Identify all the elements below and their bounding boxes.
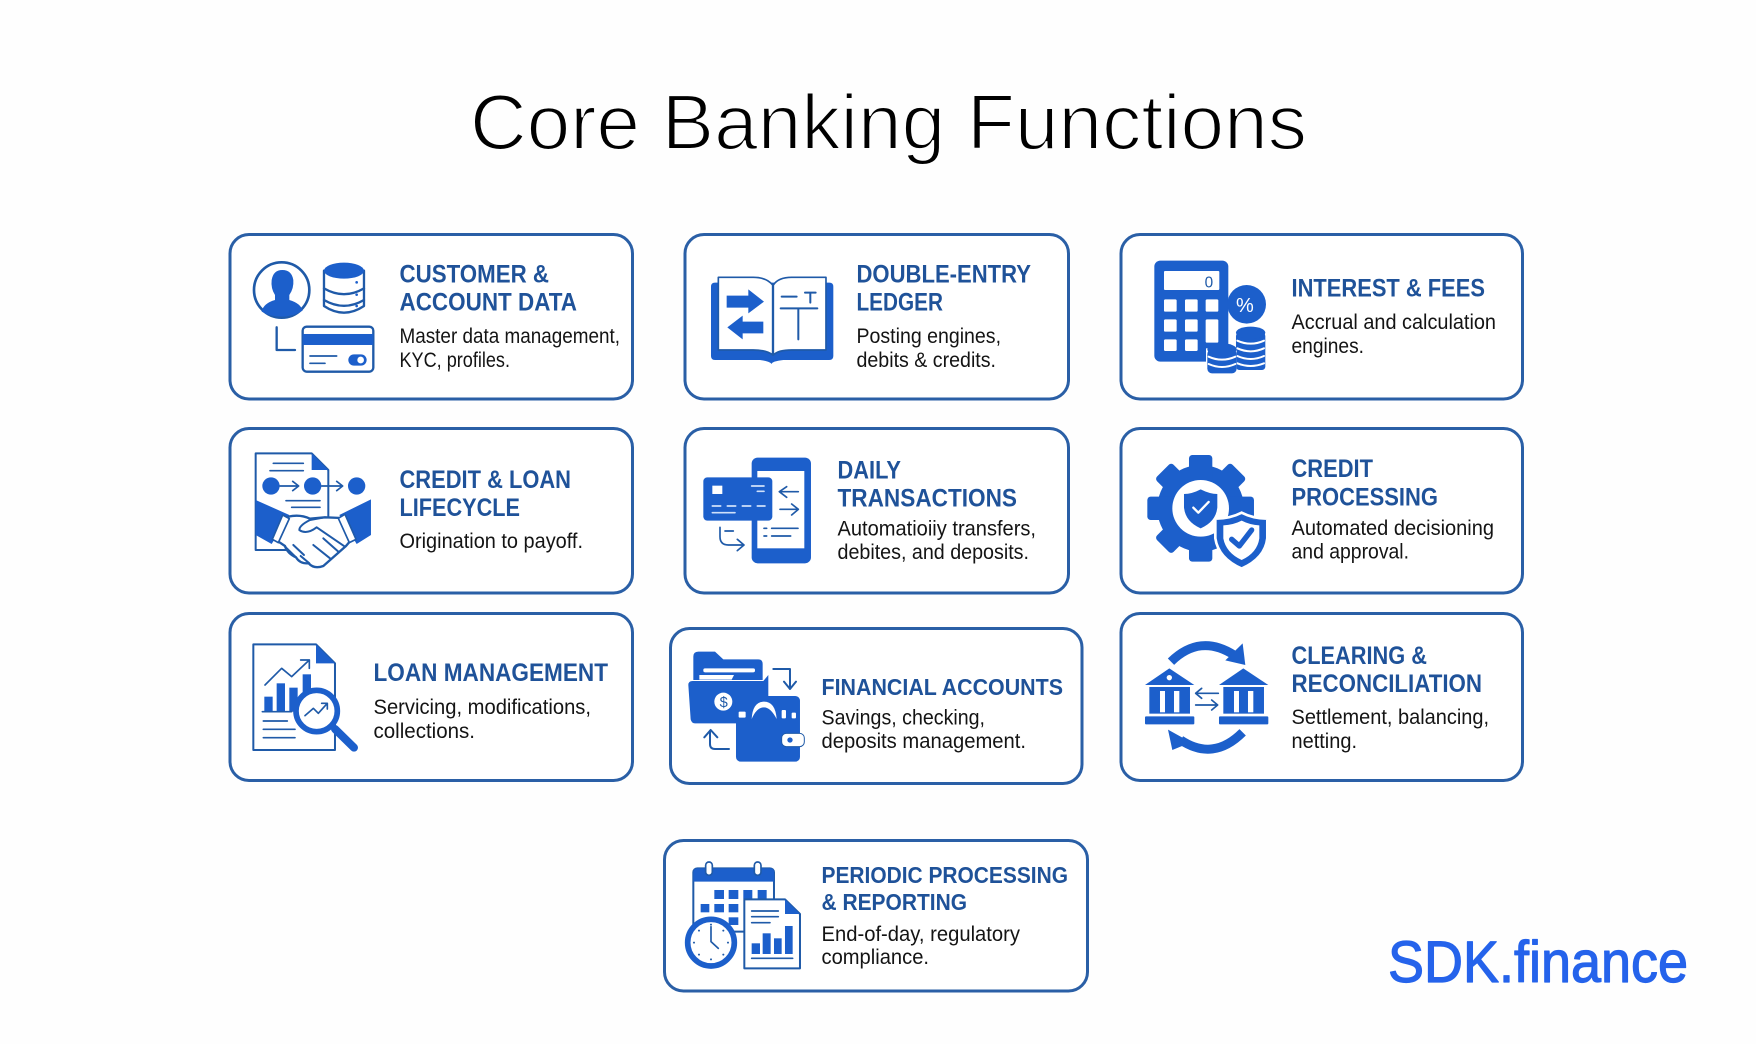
heading: LOAN MANAGEMENT [374,659,608,687]
icon: folder and wallet [688,652,804,762]
panel: loan management [230,614,632,780]
icon: customer, database and card [254,262,373,372]
heading: CREDIT [1292,455,1373,483]
heading [1292,455,1438,512]
description: Master data management, [400,325,620,348]
description: Automatioiiy transfers, [838,518,1036,540]
icon: banks with circular arrows [1145,643,1268,750]
icon: card and phone [703,458,811,563]
description [1292,517,1494,564]
panel: interest and fees [1121,234,1522,399]
description [822,706,1026,753]
heading [400,466,571,522]
heading: CLEARING & [1292,642,1427,670]
icon: report with magnifier [253,644,354,750]
description: Savings, checking, [822,706,985,730]
heading: PROCESSING [1292,484,1438,512]
heading: FINANCIAL ACCOUNTS [822,674,1063,700]
heading [400,260,577,316]
heading: CREDIT & LOAN [400,466,571,494]
icon: folder and wallet: $ [720,695,728,711]
description [1292,706,1489,753]
heading: INTEREST & FEES [1292,274,1485,302]
description [856,325,1001,372]
heading: & REPORTING [822,889,967,915]
panel: periodic processing and reporting [664,840,1088,991]
description: KYC, profiles. [400,349,510,372]
heading [856,260,1031,316]
description: Automated decisioning [1292,517,1494,540]
heading [838,456,1017,512]
logo: SDK.finance: SDK.finance [1388,930,1688,995]
description: debites, and deposits. [838,541,1029,564]
icon: calculator with coins: % [1236,295,1254,317]
icon: open ledger book [711,277,833,364]
icon: calculator with coins: 0 [1205,274,1213,291]
panel: customer and account data [230,234,632,399]
heading: LIFECYCLE [400,494,520,522]
description [400,325,620,372]
description: Settlement, balancing, [1292,706,1489,729]
heading: ACCOUNT DATA [400,288,577,316]
description [374,696,591,743]
description [822,923,1020,969]
description: and approval. [1292,540,1409,564]
heading: PERIODIC PROCESSING [822,862,1068,888]
description: Accrual and calculation [1292,311,1496,334]
panel: credit and loan lifecycle [230,428,632,593]
description [838,518,1036,564]
heading: DOUBLE-ENTRY [856,260,1031,288]
icon: gear with shields [1147,455,1267,569]
heading: DAILY [838,456,901,484]
description: engines. [1292,335,1364,358]
description: deposits management. [822,730,1026,753]
description [1292,311,1496,358]
icon: document flow and handshake [256,453,371,567]
description: End-of-day, regulatory [822,923,1020,946]
description: Origination to payoff. [400,530,583,553]
heading: LEDGER [856,288,943,316]
heading: CUSTOMER & [400,260,549,288]
description: debits & credits. [856,349,996,372]
heading [822,862,1068,915]
panel: daily transactions [685,428,1068,593]
heading: TRANSACTIONS [838,484,1017,512]
panel: credit processing [1121,428,1522,593]
title: Core Banking Functions [470,78,1307,166]
description: netting. [1292,730,1357,753]
description: collections. [374,720,475,743]
description: compliance. [822,946,929,969]
icon: calendar, clock and report [688,862,800,968]
heading [1292,642,1482,698]
panel: clearing and reconciliation [1121,614,1522,780]
description: Posting engines, [856,325,1001,348]
panel: financial accounts [670,628,1082,784]
description: Servicing, modifications, [374,696,591,719]
panel: double-entry ledger [685,234,1068,399]
heading: RECONCILIATION [1292,670,1482,698]
icon: calculator with coins [1154,261,1266,373]
